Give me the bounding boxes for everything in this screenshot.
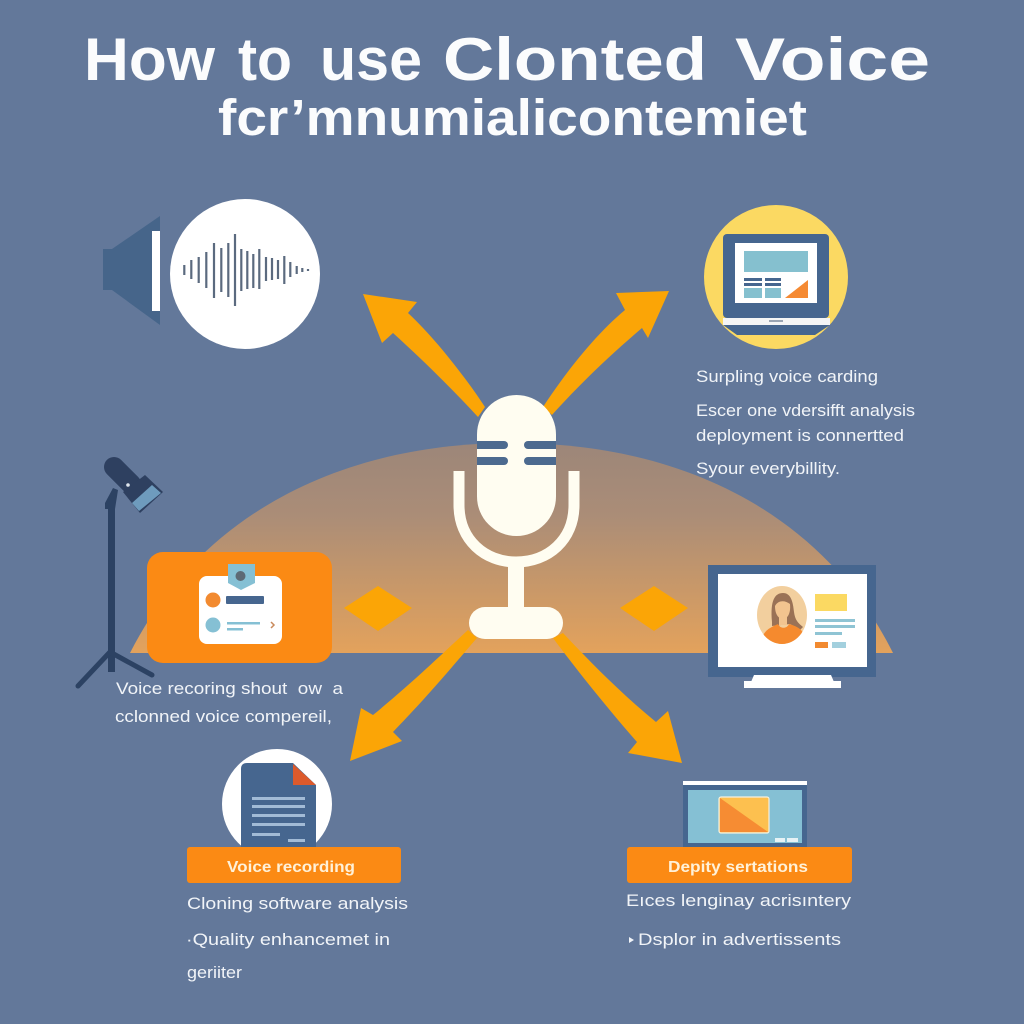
panel: voice recording label: Voice recording [227, 859, 355, 876]
title: fcr’mnumialicontemiet [218, 89, 807, 146]
text block: lower right list: Dsplor in advertissents [638, 930, 841, 949]
text block: left caption: cclonned voice compereil, [115, 708, 332, 726]
text block: lower right list: Eıces lenginay acrisıntery [626, 891, 852, 910]
arrow: to upper right [543, 291, 669, 415]
text block: lower left list: ·Quality enhancemet in [186, 930, 390, 949]
text block: upper right: deployment is connertted [696, 427, 904, 445]
title: How [84, 26, 215, 93]
icon: document in white circle [222, 749, 332, 847]
waveform bars [184, 234, 308, 306]
panel: voice recording label [187, 847, 401, 883]
text block: lower right list [626, 891, 852, 949]
panel: orange recording card [147, 552, 332, 663]
text block: lower left list: Cloning software analysis [187, 894, 408, 913]
icon: monitor with profile [708, 565, 876, 688]
waveform circle [170, 199, 320, 349]
icon: laptop in yellow circle [704, 205, 848, 349]
title: Voice [735, 26, 930, 93]
icon: presentation slide [683, 781, 807, 847]
title: to [238, 26, 292, 93]
icon: microphone on stand [78, 467, 163, 686]
icon: central microphone [459, 395, 574, 639]
arrow: right diamond [620, 586, 688, 631]
title [84, 26, 930, 146]
icon: speaker with waveform [103, 199, 320, 349]
arrow: to upper left [363, 294, 485, 417]
speaker white bar [152, 231, 160, 311]
text block: upper right: Syour everybillity. [696, 460, 840, 478]
text block: lower left list [186, 894, 408, 982]
dome background [130, 443, 893, 653]
text block: upper right: Escer one vdersifft analysis [696, 402, 915, 420]
title: Clonted [443, 26, 707, 93]
text block: left caption: Voice recoring shout ow a [116, 680, 344, 698]
panel: deploy label: Depity sertations [668, 859, 808, 876]
arrow: to lower right [553, 633, 682, 763]
text block: left caption [115, 680, 344, 726]
arrow: to lower left [350, 630, 477, 761]
text block: upper right: Surpling voice carding [696, 368, 878, 386]
panel: deploy label [627, 847, 852, 883]
title: use [320, 26, 422, 93]
arrow: left diamond [344, 586, 412, 631]
text block: lower left list: geriiter [187, 963, 242, 982]
text block: upper right [696, 368, 915, 478]
speaker cone [103, 216, 160, 325]
